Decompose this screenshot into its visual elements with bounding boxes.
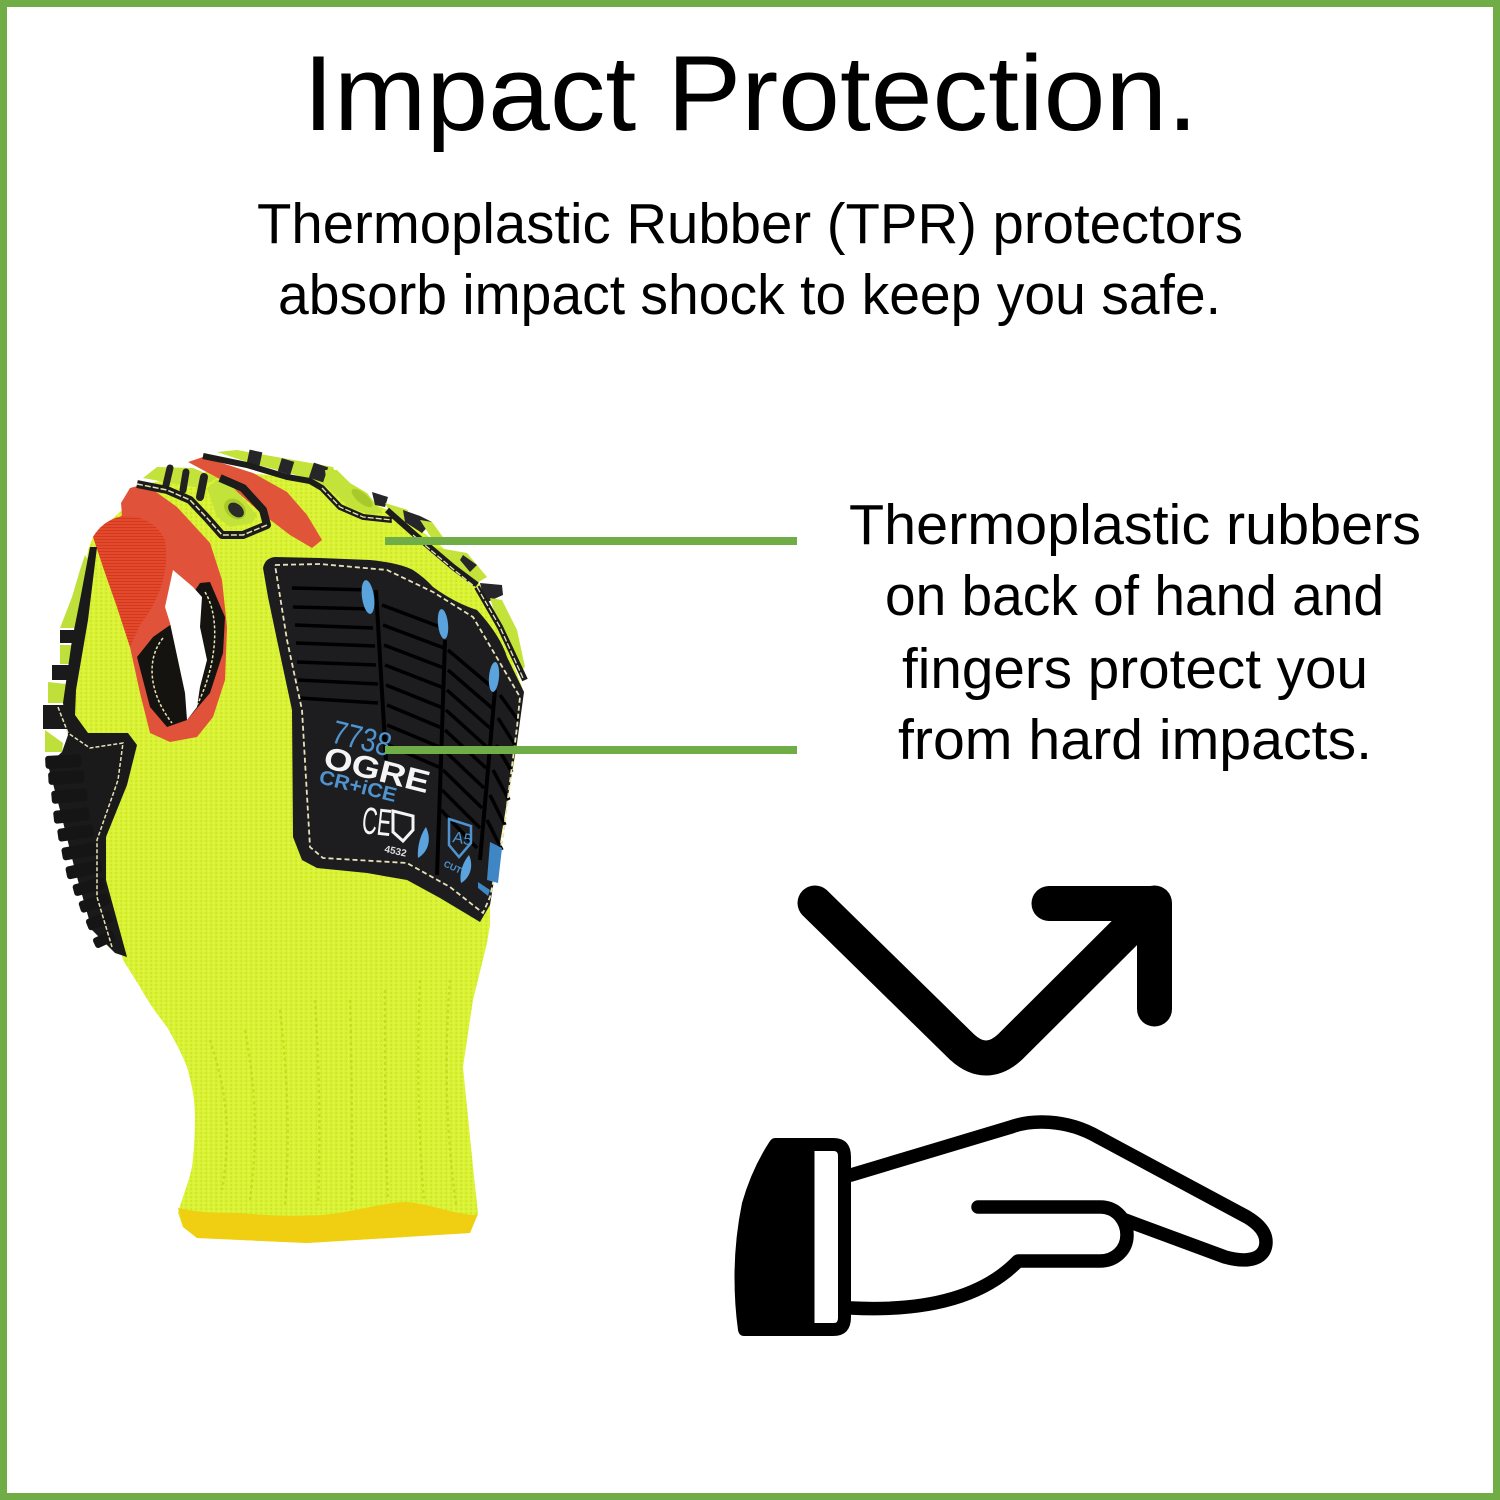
subtitle: absorb impact shock to keep you safe.: [278, 263, 1221, 327]
glove body: [67, 470, 523, 1243]
subtitle: Thermoplastic Rubber (TPR) protectors: [257, 192, 1243, 256]
finger one lime blocks: [143, 467, 217, 488]
finger two blocks: [217, 450, 340, 495]
knuckle blocks: [60, 555, 88, 628]
hand outline: [851, 1122, 1266, 1260]
wrist ribbing: [210, 980, 456, 1205]
red finger stripe: [188, 457, 322, 548]
thumb outline: [851, 1207, 1127, 1309]
CE mark: CE: [360, 800, 393, 845]
pad column dividers: [376, 590, 495, 875]
finger three blocks: [325, 470, 382, 515]
red palm coating: [103, 484, 227, 742]
finger guards: [137, 450, 525, 680]
title: Impact Protection.: [303, 33, 1198, 153]
icon: rebound arrow: [815, 903, 1154, 1058]
callout text: Thermoplastic rubbers: [849, 493, 1421, 557]
guard stitching: [58, 707, 123, 947]
thumb opening: [165, 570, 207, 720]
yellow cuff hem: [178, 1202, 478, 1243]
red thumb tip: [93, 516, 166, 647]
left side guard: [43, 547, 137, 957]
icon: protected hand: [734, 1122, 1266, 1336]
black thumb crotch patch: [137, 582, 225, 727]
patch stitching: [152, 592, 215, 723]
impact rating block: [478, 842, 502, 896]
back-of-hand TPR pad: [263, 557, 524, 922]
rating code: 4532: [383, 844, 408, 860]
finger one band: [137, 478, 267, 535]
finger four blocks: [480, 583, 503, 603]
safety shield: [393, 811, 413, 841]
cut rating shield: CUT: [442, 859, 464, 876]
callout text: on back of hand and: [885, 564, 1384, 628]
callout leader lines: [385, 537, 797, 754]
glove cuff: [734, 1138, 851, 1336]
model number: 7738: [328, 713, 395, 763]
blue drops: [360, 579, 500, 883]
brand name: OGRE: [320, 740, 434, 800]
subtitle: [257, 192, 1243, 327]
callout text: [849, 493, 1421, 772]
pad ridges: [292, 588, 518, 850]
teeth: [45, 754, 117, 949]
pad stitching: [275, 564, 520, 913]
cut rating shield: [442, 819, 474, 876]
guard band: [48, 547, 137, 957]
cut rating shield: A5: [451, 829, 474, 849]
glove photo illustration: [43, 450, 525, 1243]
callout text: from hard impacts.: [898, 708, 1372, 772]
product line: CR+iCE: [317, 767, 399, 807]
callout text: fingers protect you: [902, 637, 1368, 701]
